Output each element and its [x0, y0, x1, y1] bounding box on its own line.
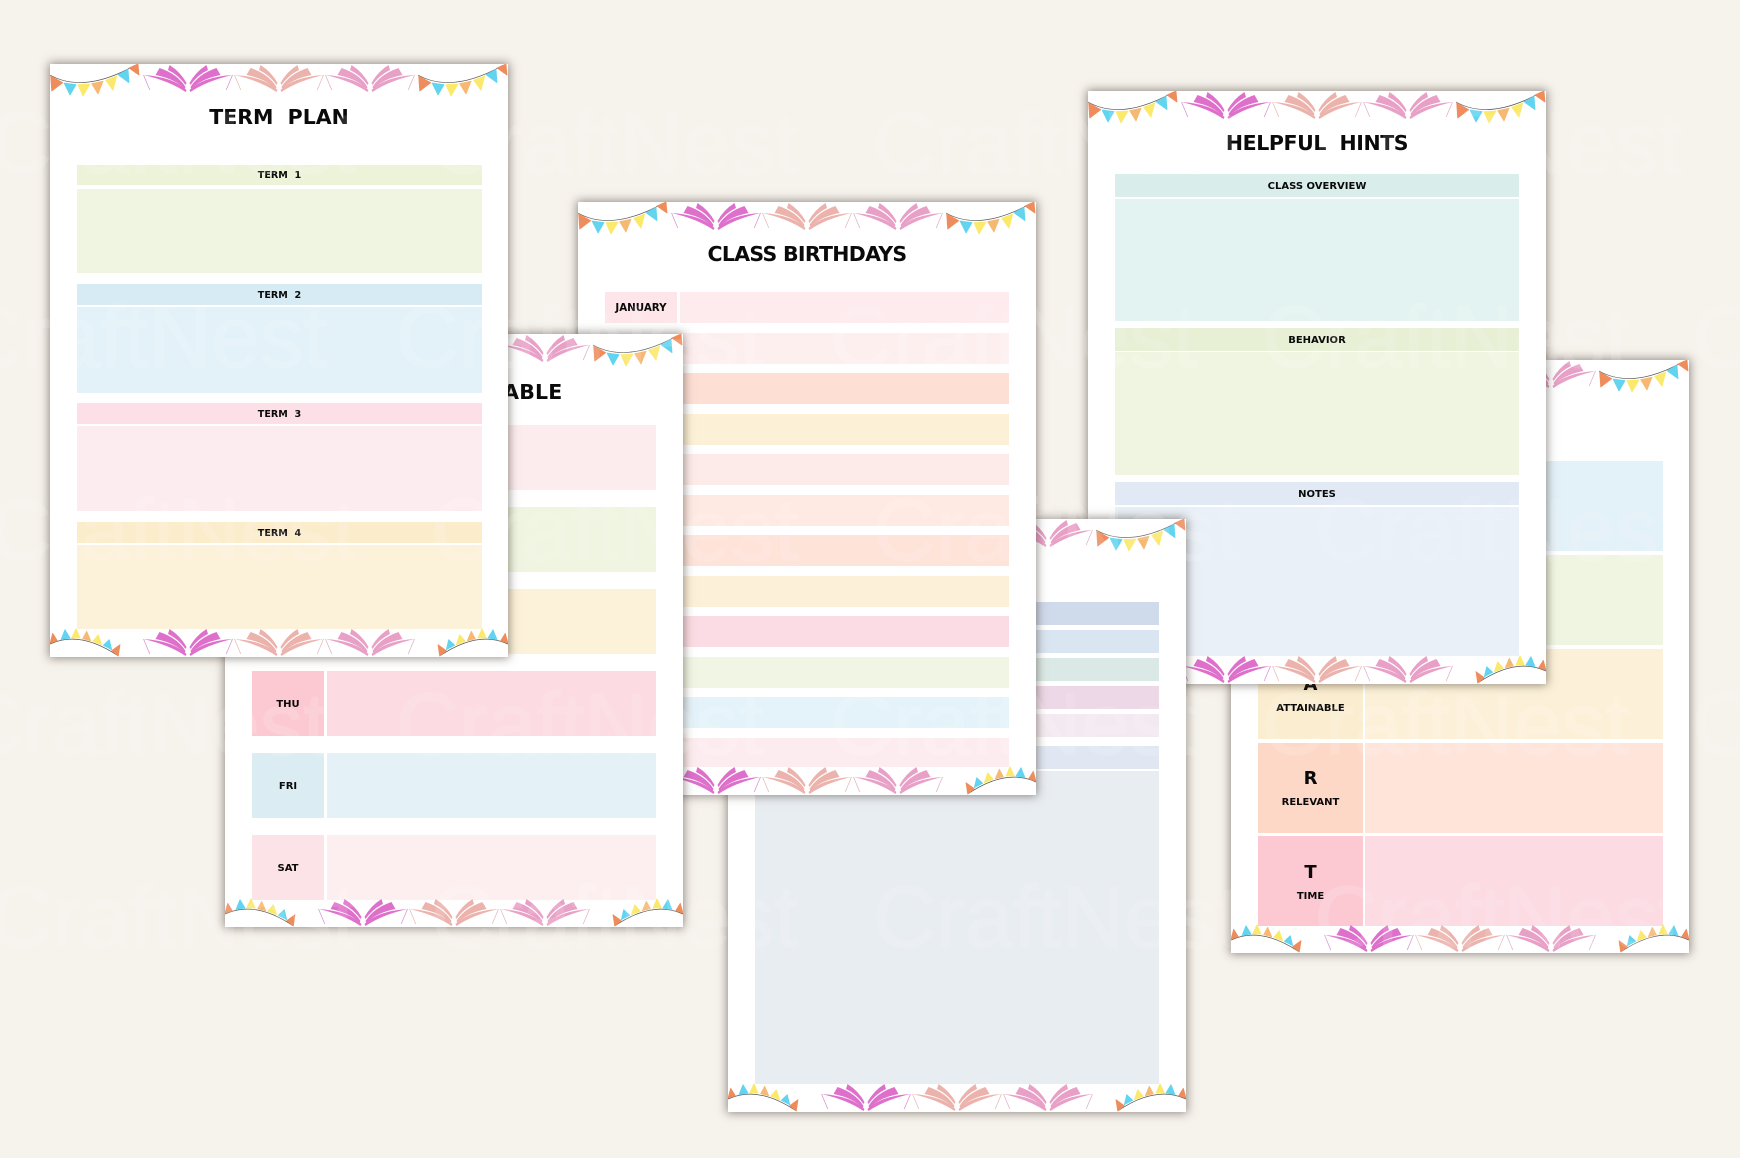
ornament: top bunting [1036, 519, 1186, 552]
ornament: top bunting [508, 334, 682, 366]
list row 3 [755, 658, 1159, 681]
section body: behavior [1115, 352, 1519, 475]
row: R label [1258, 743, 1363, 833]
panel: class timetable page [225, 334, 683, 927]
row: T label [1258, 836, 1363, 926]
watermark overlay: CraftNest [1262, 676, 1629, 773]
term 3 body [77, 426, 482, 511]
panel: helpful hints page [1088, 91, 1546, 684]
ornament: top bunting [50, 64, 508, 96]
watermark overlay: CraftNest [1315, 95, 1682, 192]
ornament: top bunting [578, 202, 1036, 234]
row: T label: T [1304, 862, 1317, 883]
list row 4 [755, 686, 1159, 709]
watermark overlay: CraftNest [396, 289, 763, 386]
row: R field [1365, 743, 1663, 833]
term 2 header [77, 284, 482, 305]
term 4 header: TERM 4 [258, 528, 301, 538]
day label: Thu [252, 671, 324, 736]
watermark overlay: CraftNest [1262, 289, 1629, 386]
month label: January: JANUARY [615, 302, 667, 314]
month row 1 [680, 292, 1009, 323]
row: T field [1365, 836, 1663, 926]
term 3 header [77, 403, 482, 424]
term 1 header: TERM 1 [258, 170, 301, 181]
field: Fri [327, 753, 656, 818]
panel: blue list page [728, 519, 1186, 1112]
field: Sat [327, 835, 656, 900]
watermark overlay: CraftNest [873, 869, 1240, 966]
watermark overlay: CraftNest [431, 482, 798, 579]
section header: behavior: BEHAVIOR [1288, 334, 1346, 346]
day label: Sat [252, 835, 324, 900]
day label: Thu: THU [276, 698, 300, 710]
row: R label: R [1304, 768, 1317, 789]
day label: Sat: SAT [278, 862, 298, 874]
term 4 body [77, 545, 482, 629]
row: S [1365, 461, 1663, 551]
ornament: bottom bunting [1186, 655, 1546, 684]
month label: January [605, 292, 677, 323]
heading: CLASS TIMETABLE [345, 380, 563, 404]
term 3 header: TERM 3 [258, 408, 301, 420]
field: Thu [327, 671, 656, 736]
month row 6 [680, 495, 1009, 526]
ornament: bottom bunting [50, 628, 508, 656]
watermark overlay: CraftNest [0, 482, 356, 579]
row: A label [1258, 649, 1363, 739]
term 4 header [77, 522, 482, 543]
panel: SMART goals page [1231, 360, 1689, 953]
month row 12 [680, 738, 1009, 767]
month row 10 [680, 657, 1009, 688]
list row 6 [755, 746, 1159, 769]
row: A label: A [1304, 674, 1317, 695]
section body: class overview [1115, 199, 1519, 321]
month row 8 [680, 576, 1009, 607]
month row 7 [680, 535, 1009, 566]
month row 4 [680, 414, 1009, 445]
day label: Fri [252, 753, 324, 818]
watermark overlay: CraftNest [830, 676, 1197, 773]
watermark overlay: CraftNest [873, 95, 1240, 192]
ornament: top bunting [1088, 91, 1546, 124]
term 1 header [77, 165, 482, 185]
watermark overlay: CraftNest [396, 676, 763, 773]
row: T label: TIME [1297, 891, 1324, 902]
heading: TERM PLAN [209, 105, 349, 129]
panel: class birthdays page [578, 202, 1036, 795]
section header: class overview: CLASS OVERVIEW [1268, 180, 1366, 192]
term 2 body [77, 307, 482, 393]
ornament: bottom bunting [728, 1083, 1186, 1112]
ornament: top bunting [1546, 360, 1688, 392]
watermark overlay: CraftNest [431, 869, 798, 966]
month row 9 [680, 616, 1009, 647]
watermark overlay: CraftNest [0, 95, 356, 192]
watermark overlay: CraftNest [0, 869, 356, 966]
watermark overlay: CraftNest [1315, 482, 1682, 579]
ornament: bottom bunting [225, 898, 683, 926]
ornament: bottom bunting [1231, 924, 1689, 952]
month row 5 [680, 454, 1009, 485]
list row 5 [755, 714, 1159, 737]
month row 2 [680, 333, 1009, 364]
list row 2 [755, 630, 1159, 653]
heading: HELPFUL HINTS [1226, 131, 1408, 155]
section header: notes: NOTES [1298, 488, 1336, 500]
list row 1 [755, 602, 1159, 625]
watermark overlay: CraftNest [830, 289, 1197, 386]
row: A field [1365, 649, 1663, 739]
watermark overlay: CraftNest [1315, 869, 1682, 966]
panel: term plan page [50, 64, 508, 657]
month row 3 [680, 373, 1009, 404]
ornament: bottom bunting [683, 766, 1036, 794]
section body: notes [1115, 507, 1519, 656]
month row 11 [680, 697, 1009, 728]
section header: class overview [1115, 174, 1519, 197]
field: row 1 [327, 425, 656, 490]
field: row 2 [327, 507, 656, 572]
section header: notes [1115, 482, 1519, 505]
watermark overlay: CraftNest [431, 95, 798, 192]
field: row 3 [327, 589, 656, 654]
section header: behavior [1115, 328, 1519, 351]
term 1 body [77, 189, 482, 273]
term 2 header: TERM 2 [258, 290, 301, 300]
row: A label: ATTAINABLE [1276, 703, 1345, 714]
row: R label: RELEVANT [1282, 797, 1339, 808]
watermark overlay: CraftNest [873, 482, 1240, 579]
heading: CLASS BIRTHDAYS [707, 242, 906, 266]
large notes area [755, 771, 1159, 1084]
row: M [1365, 555, 1663, 645]
day label: Fri: FRI [279, 780, 297, 792]
